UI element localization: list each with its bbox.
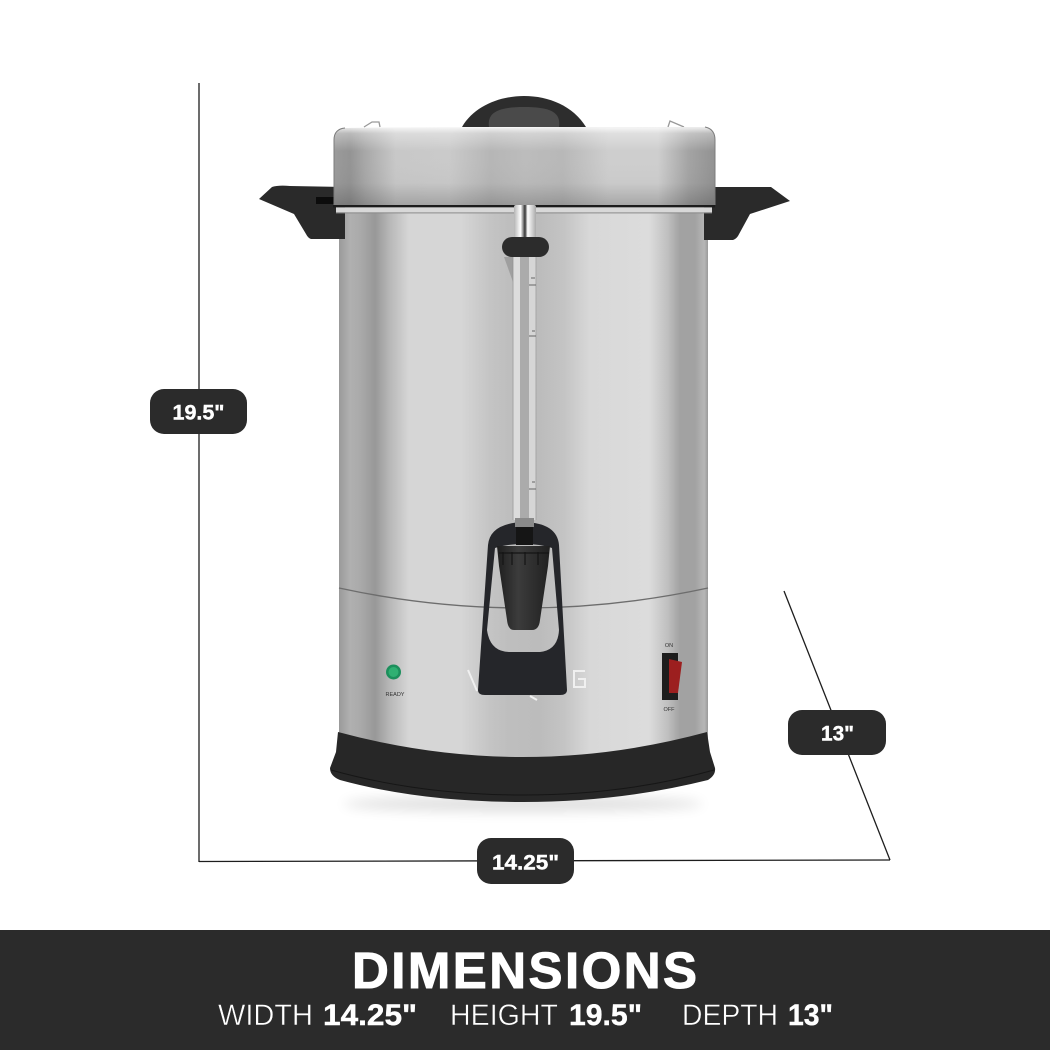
power switch: ON	[665, 643, 673, 649]
depth label pill: 13"	[821, 722, 854, 746]
spout connector	[515, 518, 534, 545]
height spec: 19.5"	[569, 999, 642, 1032]
depth spec	[682, 999, 833, 1032]
floor shadow	[343, 796, 703, 812]
gauge cap	[502, 237, 549, 257]
power switch	[662, 643, 682, 713]
spout bracket	[478, 522, 567, 695]
lid rim	[333, 205, 715, 213]
heating base housing	[339, 588, 708, 775]
height dimension line	[198, 83, 200, 862]
height spec: HEIGHT	[450, 999, 558, 1032]
seam	[339, 588, 708, 608]
ready indicator light	[386, 664, 405, 698]
urn body	[339, 205, 708, 625]
gauge shadow	[504, 257, 513, 282]
ready label: READY	[386, 692, 405, 698]
width spec: 14.25"	[323, 999, 417, 1032]
depth dimension line	[784, 591, 890, 860]
width spec	[218, 999, 417, 1032]
lid knob	[462, 96, 586, 127]
depth spec: DEPTH	[682, 999, 778, 1032]
left handle	[259, 186, 345, 239]
height label pill	[150, 389, 247, 434]
width label pill: 14.25"	[492, 852, 559, 874]
depth label pill	[788, 710, 886, 755]
lid clips	[364, 121, 684, 127]
footer band	[0, 930, 1050, 1050]
faucet tap	[497, 546, 550, 630]
chrome valve	[514, 205, 536, 239]
width spec: WIDTH	[218, 999, 313, 1032]
logo fragments	[468, 670, 585, 700]
gauge marks	[529, 278, 536, 489]
height spec	[450, 999, 642, 1032]
power switch: OFF	[664, 707, 675, 713]
heading: DIMENSIONS	[352, 942, 697, 999]
sight gauge tube	[513, 257, 536, 520]
width label pill	[477, 838, 574, 884]
width dimension line	[199, 860, 890, 862]
height label pill: 19.5"	[172, 402, 224, 424]
lid	[334, 127, 715, 205]
depth spec: 13"	[788, 999, 833, 1032]
rubber base	[330, 732, 715, 802]
coffee urn product image	[259, 96, 790, 812]
right handle	[704, 187, 790, 240]
